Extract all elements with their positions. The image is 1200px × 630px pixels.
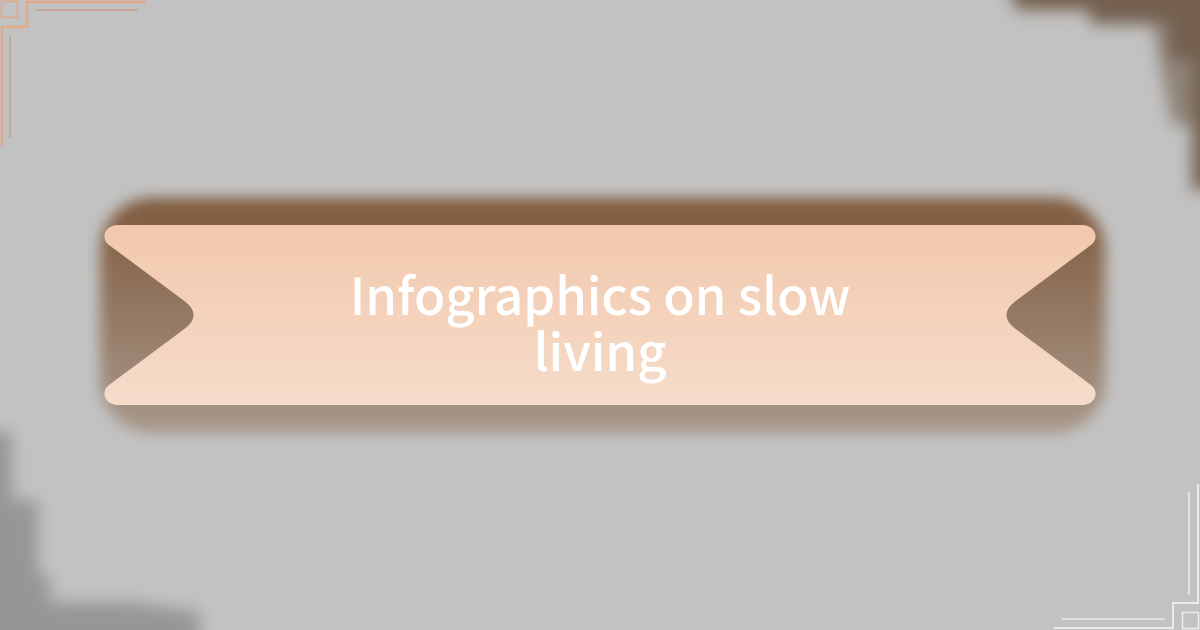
blurred shadow: top right corner xyxy=(1008,0,1200,190)
decorative corner frame: top left xyxy=(2,1,146,146)
title xyxy=(350,256,850,386)
decorative corner frame: bottom right xyxy=(1054,484,1198,629)
blurred shadow: bottom left corner xyxy=(0,432,200,630)
banner shadow xyxy=(100,198,1105,433)
banner ribbon xyxy=(104,225,1096,405)
title: Infographics on slow xyxy=(350,256,850,330)
title: living xyxy=(533,312,667,386)
